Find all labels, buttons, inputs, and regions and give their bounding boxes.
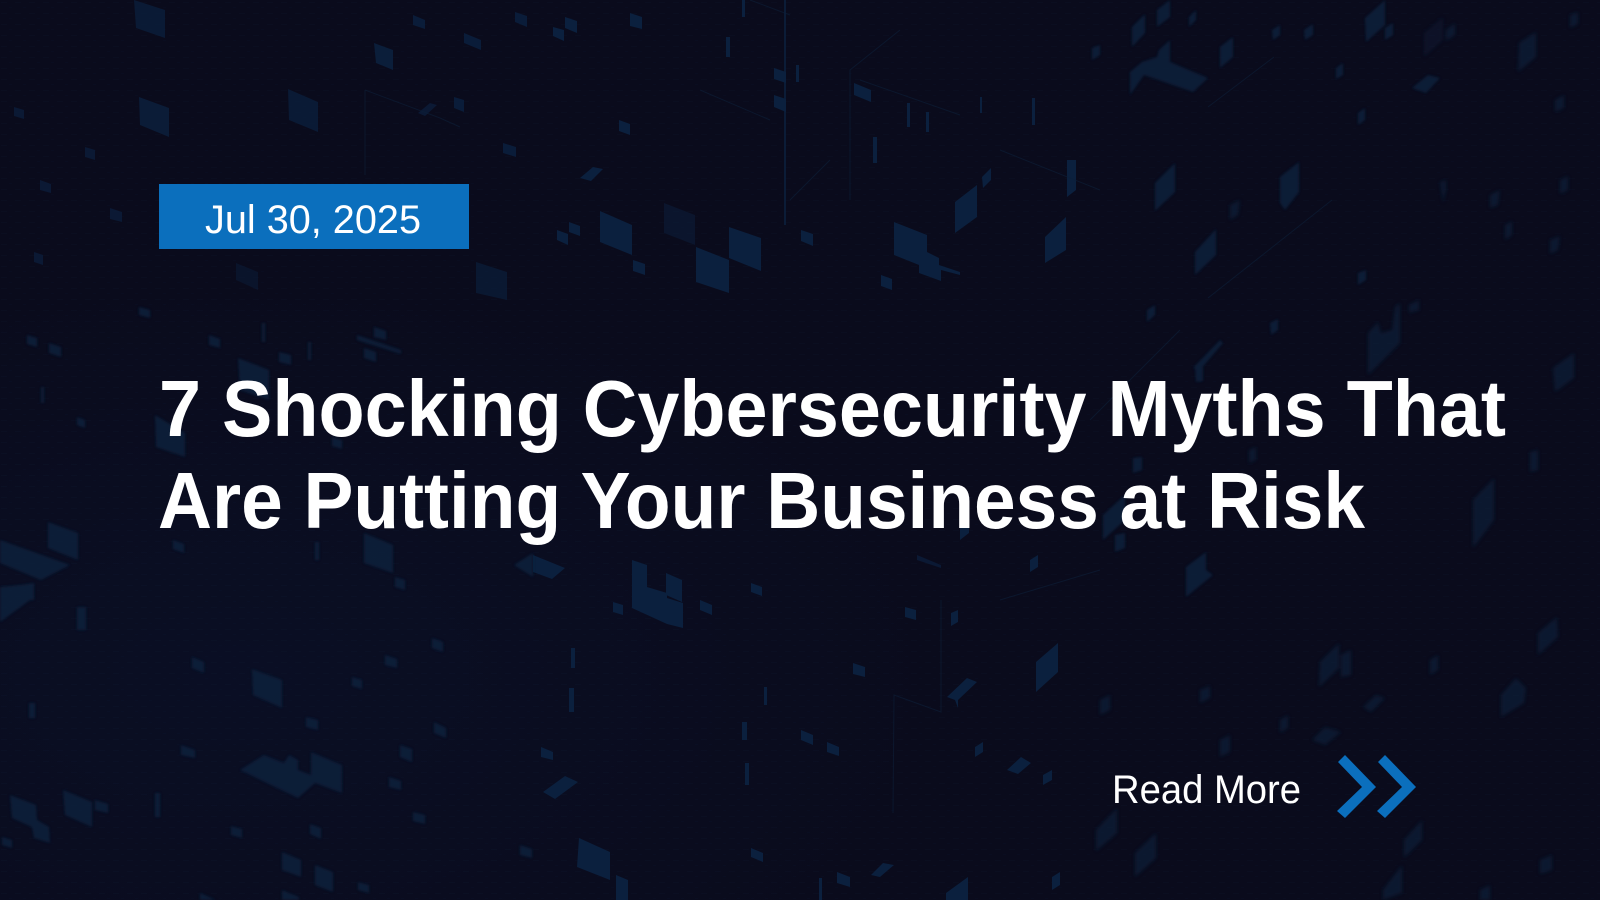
title — [158, 364, 1506, 545]
title: Are Putting Your Business at Risk — [158, 456, 1365, 545]
date text: Jul 30, 2025 — [205, 198, 421, 242]
read more link — [1112, 755, 1416, 818]
date badge — [159, 184, 469, 249]
title: 7 Shocking Cybersecurity Myths That — [159, 364, 1506, 453]
read more link: Read More — [1112, 768, 1301, 812]
faint circuit lines — [365, 0, 1332, 813]
icon: double chevron arrow — [1337, 755, 1416, 818]
